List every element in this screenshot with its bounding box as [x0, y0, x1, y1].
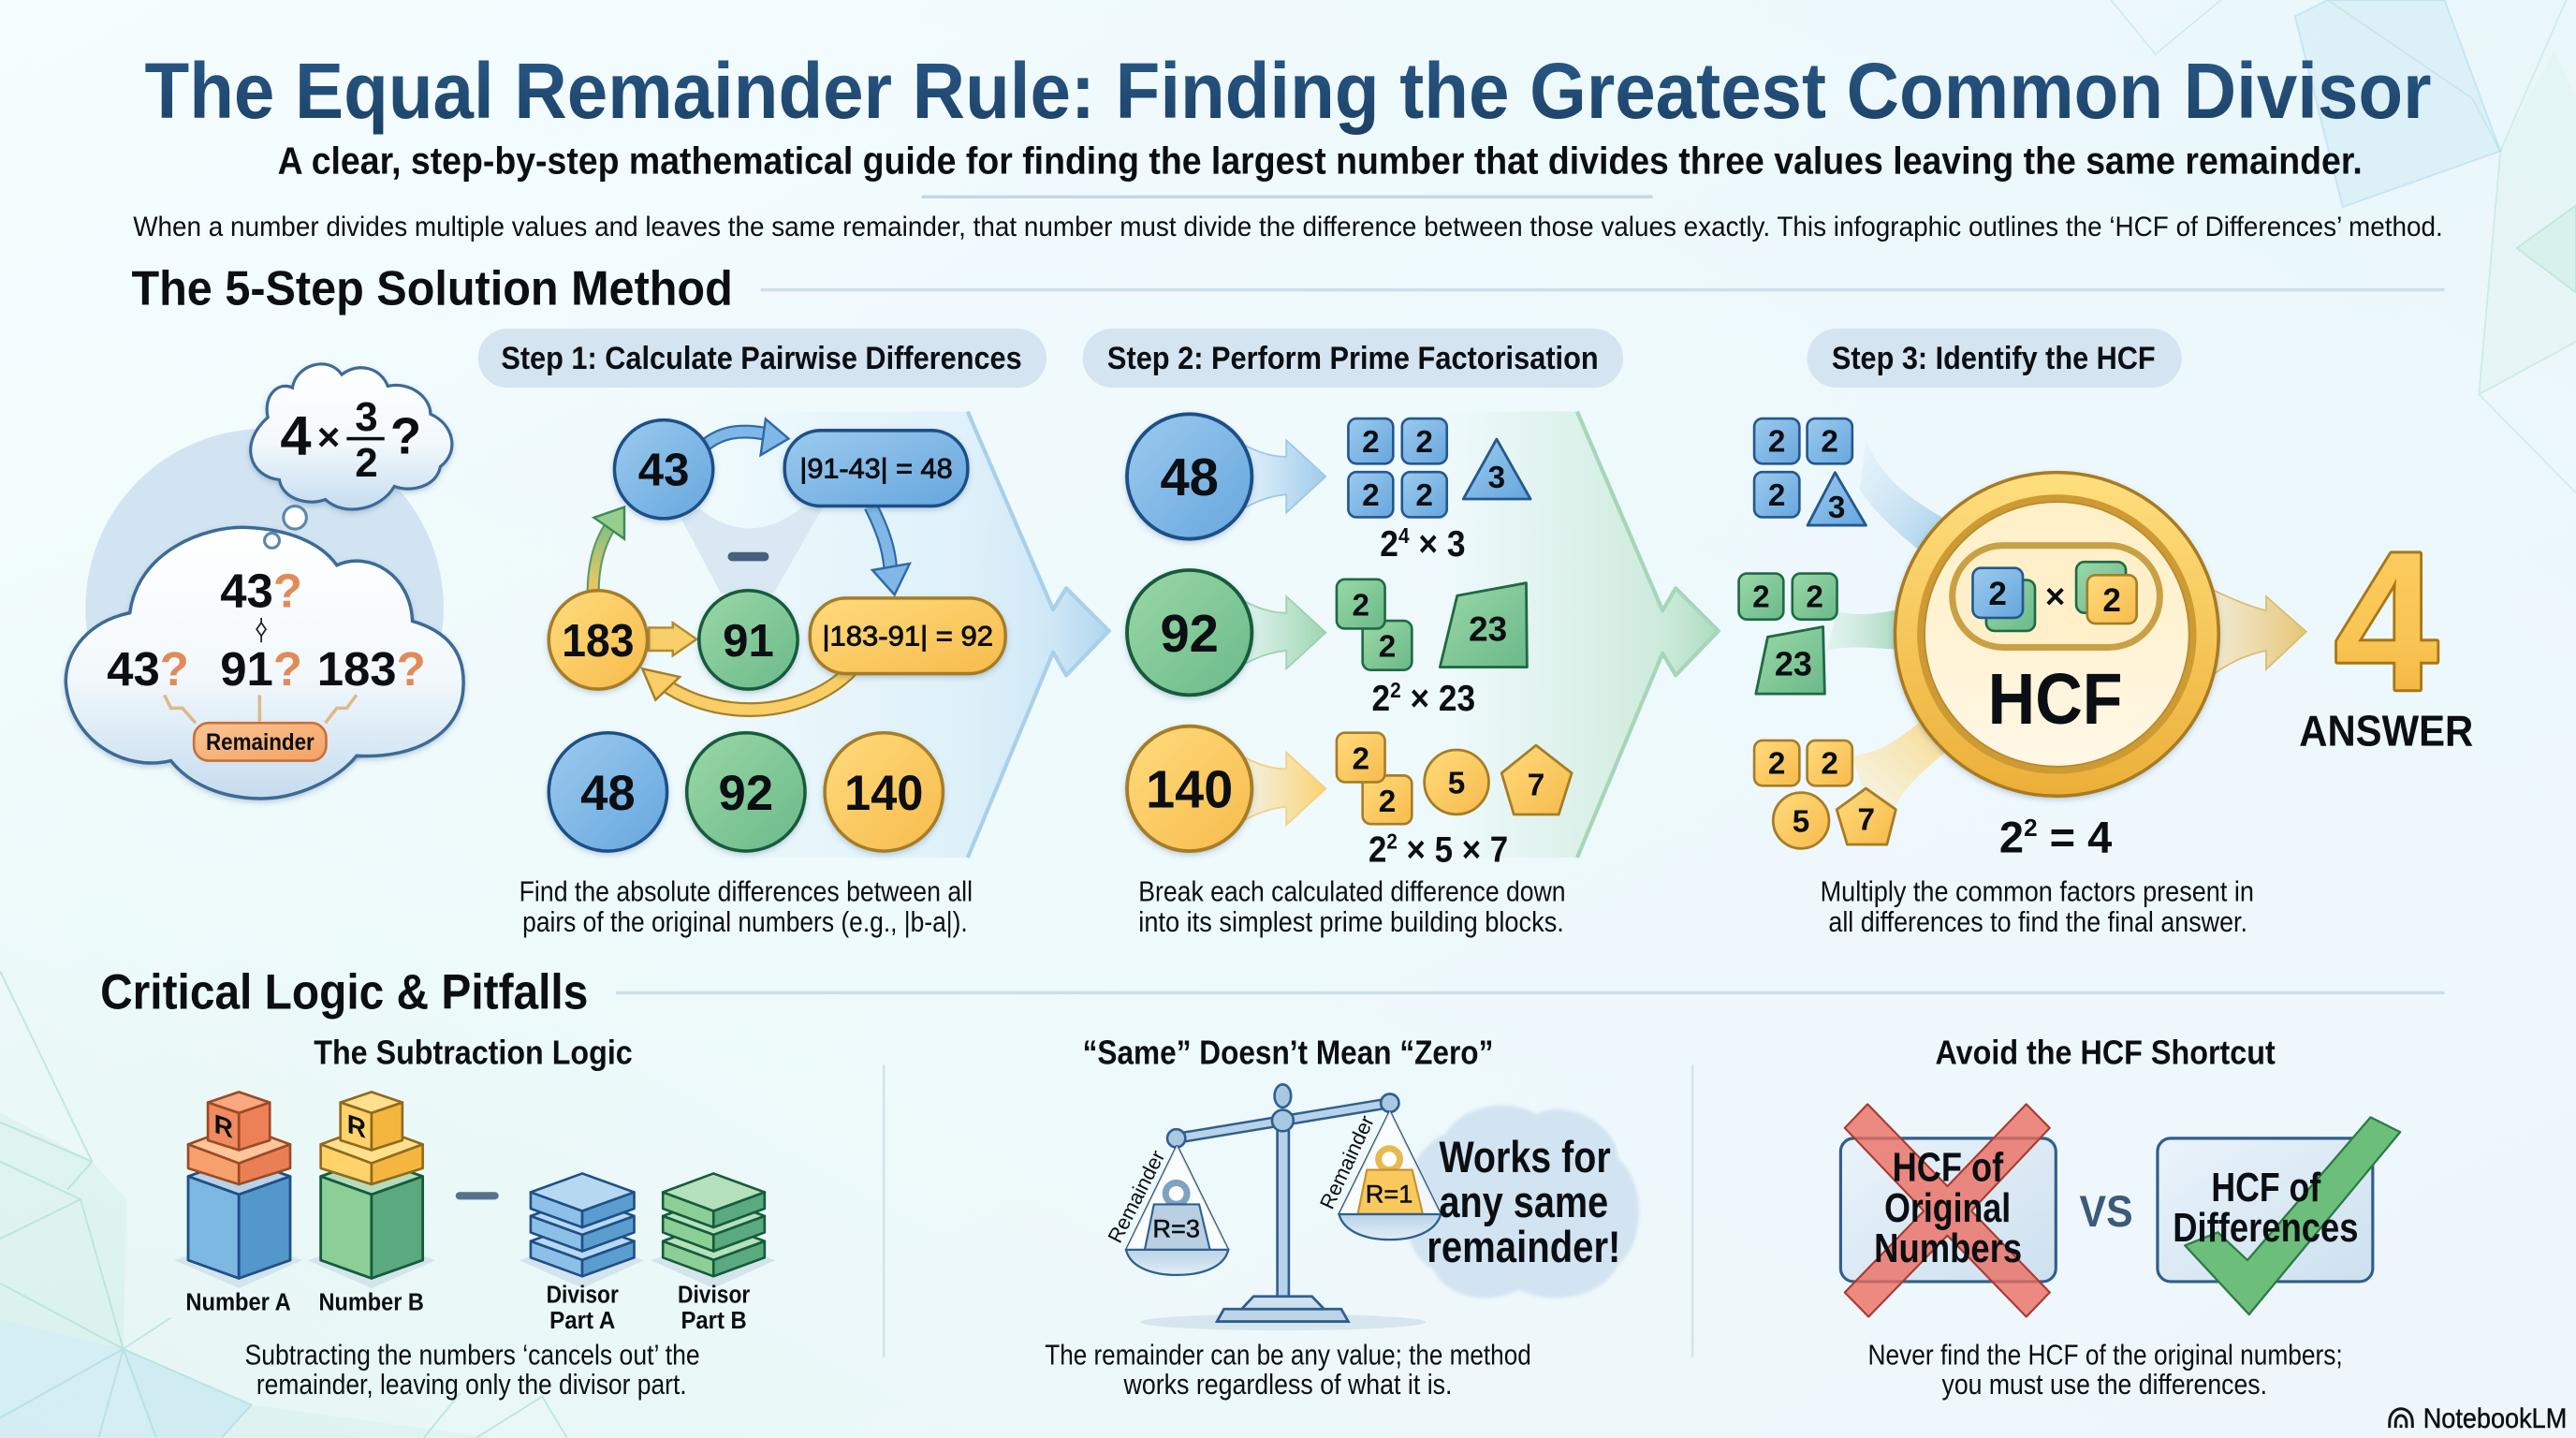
caption: step 3: Multiply the common factors present in [1821, 877, 2254, 908]
section heading: critical logic: Critical Logic & Pitfalls [100, 965, 588, 1020]
result 140 [825, 733, 943, 851]
section heading: 5-step method: The 5-Step Solution Method [131, 261, 733, 315]
common factor blocks: 2 [1988, 576, 2007, 612]
remainder pill [194, 723, 326, 761]
row: 48: 3 [1488, 461, 1505, 495]
caption [1868, 1341, 2343, 1401]
yellow factors [1754, 741, 1895, 848]
HCF medallion [1895, 473, 2218, 796]
stack labels: Number B [319, 1288, 424, 1316]
callout text: remainder! [1427, 1223, 1620, 1272]
yellow factors: 7 [1857, 802, 1875, 837]
panel: subtraction logic [174, 1033, 775, 1401]
box: HCF of differences: HCF of [2211, 1165, 2321, 1211]
common factor blocks [1972, 562, 2137, 631]
numbers with question marks: 91? [220, 642, 302, 696]
blue factors: 2 [1768, 478, 1785, 513]
thought cloud: fraction question: 4 [280, 404, 312, 467]
stack labels: Part A [549, 1306, 615, 1334]
thought cloud: fraction question: 3 [355, 394, 378, 440]
row: 92: × 23 [1401, 679, 1475, 719]
heading: “Same” Doesn’t Mean “Zero” [1083, 1033, 1493, 1071]
row: 140: 2 [1352, 741, 1369, 776]
row: 92: 2 [1352, 588, 1369, 623]
caption: step 3 [1821, 877, 2254, 938]
arrow panel: step 1 background [690, 412, 1109, 858]
caption: step 1: pairs of the original numbers (e.g., |b-a|). [522, 907, 968, 938]
node 91 [699, 591, 798, 689]
result 140: 140 [844, 766, 923, 821]
panel: problem clouds [66, 364, 463, 799]
caption: remainder, leaving only the divisor part. [256, 1370, 687, 1401]
thought bubbles [284, 506, 306, 529]
arrow: pill down to yellow pill [871, 506, 910, 594]
box: HCF of original numbers: HCF of [1893, 1145, 2003, 1191]
result 48 [549, 733, 667, 851]
node 183: 183 [562, 616, 634, 667]
arrow: 183 up to 43 [593, 507, 624, 594]
caption: Never find the HCF of the original numbers; [1868, 1341, 2343, 1372]
caption: step 2 [1138, 877, 1566, 938]
row: 140: 5 [1448, 767, 1465, 801]
answer label: ANSWER [2299, 706, 2473, 755]
stack: divisor part B [651, 1173, 775, 1288]
subtraction funnel [681, 507, 823, 594]
main cloud [66, 527, 463, 799]
row: 140: × 5 × 7 [1398, 830, 1508, 871]
green factors: 23 [1775, 644, 1812, 682]
minus sign [456, 1192, 499, 1199]
stack: number A [174, 1092, 302, 1288]
row: 48: 2 [1362, 425, 1380, 460]
yellow factors: 2 [1768, 747, 1785, 782]
stack labels: Divisor [547, 1281, 619, 1309]
step 2 pill [1083, 329, 1623, 388]
caption: works regardless of what it is. [1123, 1370, 1453, 1401]
row: 92: 2 [1390, 678, 1401, 702]
common factor blocks: × [2045, 577, 2065, 615]
caption: Subtracting the numbers ‘cancels out’ the [245, 1341, 700, 1372]
row: 140 [1127, 726, 1572, 871]
blue factors: 3 [1828, 491, 1845, 525]
balance scale [1103, 1084, 1441, 1330]
title: The Equal Remainder Rule: Finding the Greatest Common Divisor [145, 47, 2431, 135]
arrow: yellow pill to 183 [642, 668, 851, 710]
intro text: When a number divides multiple values and leaves the same remainder, that number must divide the difference between those values exactly. This infographic outlines the ‘HCF of Differences’ method. [133, 212, 2443, 242]
subtitle: A clear, step-by-step mathematical guide for finding the largest number that divides three values leaving the same remainder. [278, 139, 2363, 183]
remainder pill: Remainder [206, 730, 315, 756]
yellow factors: 5 [1793, 805, 1809, 840]
row: 92: 23 [1469, 609, 1507, 648]
red cross [1845, 1104, 2050, 1316]
caption: step 1 [520, 877, 973, 938]
left pan R=3 [1103, 1145, 1228, 1275]
arrow to answer [2210, 588, 2306, 678]
step 2 pill: Step 2: Perform Prime Factorisation [1107, 341, 1599, 376]
numbers with question marks: 43? [220, 564, 302, 617]
box: HCF of differences: Differences [2173, 1205, 2359, 1251]
panel: same does not mean zero [1045, 1033, 1639, 1401]
green factors: 2 [1806, 580, 1823, 614]
answer numeral: 4 [2334, 510, 2438, 731]
flow streams into HCF [1827, 440, 1945, 808]
left pan R=3: R=3 [1152, 1214, 1200, 1243]
row: 140: 2 [1386, 829, 1398, 853]
right pan R=1: Remainder [1315, 1112, 1379, 1212]
row: 92: 92 [1160, 604, 1219, 663]
callout text: any same [1439, 1178, 1608, 1227]
caption: The remainder can be any value; the method [1045, 1341, 1531, 1372]
stack labels: Number A [185, 1288, 291, 1316]
row: 48: 2 [1415, 478, 1433, 513]
numbers with question marks [107, 564, 426, 696]
row: 92 [1127, 570, 1527, 719]
row: 48: 2 [1415, 425, 1433, 460]
panel: avoid the HCF shortcut [1840, 1033, 2400, 1401]
vs label: VS [2080, 1187, 2133, 1237]
blue factors: 2 [1768, 425, 1785, 460]
yellow factors: 2 [1821, 747, 1838, 782]
HCF equation: 2 [1999, 814, 2024, 863]
box: HCF of differences [2158, 1117, 2400, 1314]
row: 48: 2 [1362, 478, 1380, 513]
backing circle [85, 429, 444, 787]
stack labels: Part B [681, 1306, 747, 1334]
remainder connectors [165, 695, 357, 723]
stack: number B: R [347, 1109, 366, 1145]
stack labels: Divisor [678, 1281, 750, 1309]
arrow: 43 to difference pill [703, 419, 788, 455]
panel: step 3 HCF [1739, 418, 2473, 863]
node 43 [614, 420, 713, 519]
box: HCF of original numbers: Original [1884, 1185, 2011, 1231]
node 91: 91 [723, 616, 774, 667]
HCF equation: 2 [2024, 814, 2038, 842]
caption: step 2: Break each calculated difference down [1138, 877, 1566, 908]
HCF equation: = 4 [2038, 814, 2113, 863]
row: 48: 4 [1398, 523, 1410, 548]
box: HCF of original numbers: Numbers [1874, 1225, 2022, 1271]
result 48: 48 [580, 766, 636, 821]
row: 48: × 3 [1410, 524, 1466, 565]
result 92: 92 [719, 766, 773, 821]
callout text: Works for [1439, 1133, 1611, 1182]
step 1 pill [478, 329, 1046, 388]
panel: step 2 factorisation [1127, 414, 1572, 871]
thought cloud: fraction question: 2 [355, 440, 378, 486]
step 1 pill: Step 1: Calculate Pairwise Differences [501, 341, 1022, 376]
stack: number A: R [214, 1109, 233, 1145]
arrow: 183 to 91 [649, 623, 696, 655]
right pan R=1: R=1 [1366, 1180, 1412, 1209]
heading: The Subtraction Logic [314, 1033, 633, 1071]
caption: step 1: Find the absolute differences between all [520, 877, 973, 908]
result 92 [687, 733, 805, 851]
thought cloud: fraction question: ? [390, 407, 421, 464]
green factors: 2 [1752, 580, 1770, 614]
green factors [1739, 574, 1837, 694]
callout text [1427, 1133, 1620, 1272]
numbers with question marks: 183? [317, 642, 426, 696]
arrow panel: step 2 background [1445, 412, 1719, 858]
caption: step 3: all differences to find the final answer. [1828, 907, 2247, 938]
difference pill 183-91 [810, 598, 1005, 674]
left pan R=3: Remainder [1103, 1147, 1169, 1247]
caption [1045, 1341, 1531, 1401]
numbers with question marks: 43? [107, 642, 189, 696]
row: 140: 2 [1379, 785, 1396, 819]
stack: divisor part A [520, 1173, 644, 1288]
caption: step 2: into its simplest prime building blocks. [1138, 907, 1564, 938]
green check [2185, 1117, 2400, 1314]
common factor blocks: 2 [2102, 582, 2121, 619]
blue factors: 2 [1821, 425, 1838, 460]
row: 92: 2 [1379, 630, 1396, 665]
panel: step 1 diagram [549, 419, 1005, 851]
node 183 [549, 591, 648, 689]
difference pill 91-43 [784, 431, 968, 506]
node 43: 43 [638, 446, 689, 496]
blue cloud [1404, 1106, 1639, 1299]
caption [245, 1341, 700, 1401]
HCF medallion: HCF [1988, 659, 2123, 740]
stack labels [185, 1281, 750, 1334]
right pan R=1 [1315, 1110, 1441, 1240]
blue factors [1754, 418, 1866, 525]
thought cloud: fraction question: × [317, 415, 340, 459]
row: 140: 2 [1368, 830, 1388, 871]
row: 48 [1127, 414, 1530, 565]
difference pill 91-43: |91-43| = 48 [799, 454, 953, 485]
box: HCF of original numbers [1840, 1104, 2056, 1316]
row: 140: 140 [1146, 760, 1233, 819]
difference pill 183-91: |183-91| = 92 [822, 622, 993, 653]
row: 48: 2 [1380, 524, 1400, 565]
stack: number B [307, 1092, 435, 1288]
thought cloud: fraction question [251, 364, 452, 509]
step 3 pill [1808, 329, 2182, 388]
heading: Avoid the HCF Shortcut [1935, 1033, 2276, 1071]
minus sign [728, 552, 768, 561]
caption: you must use the differences. [1942, 1370, 2267, 1401]
row: 140: 7 [1528, 768, 1544, 802]
row: 48: 48 [1160, 448, 1219, 506]
step 3 pill: Step 3: Identify the HCF [1832, 341, 2156, 376]
row: 92: 2 [1372, 679, 1392, 719]
